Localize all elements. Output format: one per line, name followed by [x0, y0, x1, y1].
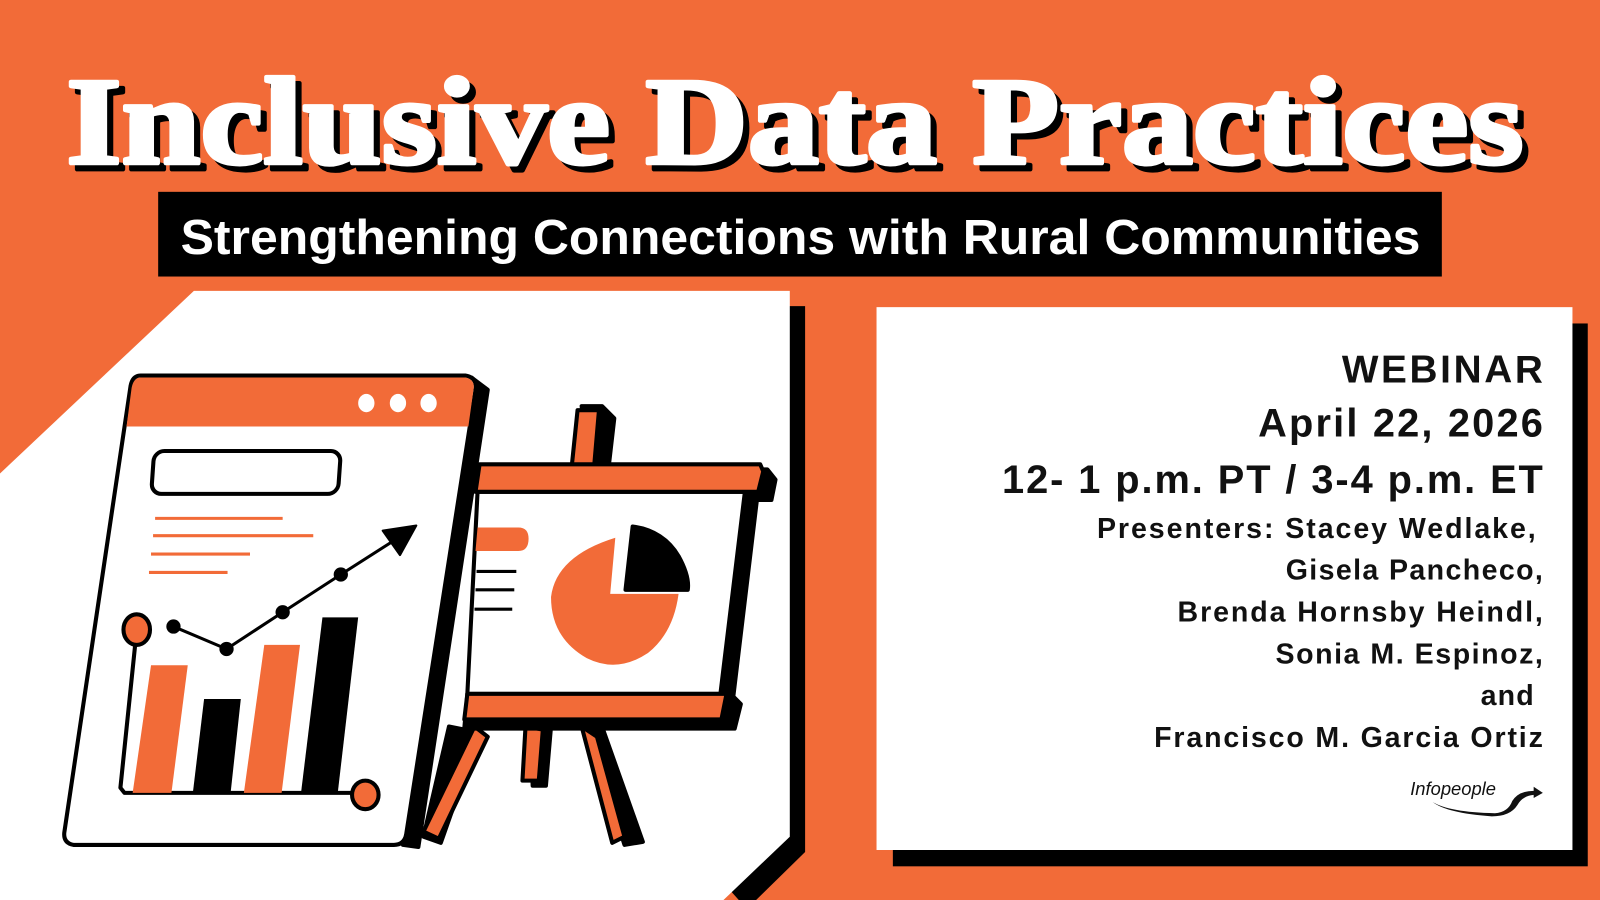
panel: illustration — [0, 291, 805, 900]
presenters — [1097, 513, 1543, 754]
heading: webinar: WEBINAR — [1342, 349, 1543, 392]
logo: Infopeople — [1410, 778, 1543, 816]
presenters: Presenters: Stacey Wedlake, — [1097, 513, 1536, 545]
subtitle banner — [158, 192, 1442, 277]
presenters: and — [1481, 680, 1534, 712]
logo: Infopeople: Infopeople — [1410, 778, 1496, 799]
icon: tablet with chart — [64, 376, 488, 847]
subtitle banner: Strengthening Connections with Rural Communities — [181, 211, 1420, 265]
time: 12- 1 p.m. PT / 3-4 p.m. ET — [1002, 458, 1543, 502]
title: Inclusive Data Practices — [66, 52, 1523, 190]
panel: webinar details — [877, 307, 1588, 866]
icon: easel with pie chart — [423, 406, 776, 845]
title: Inclusive Data Practices — [72, 58, 1530, 196]
presenters: Francisco M. Garcia Ortiz — [1154, 722, 1543, 754]
presenters: Sonia M. Espinoz, — [1276, 638, 1543, 670]
date: April 22, 2026 — [1258, 402, 1543, 446]
presenters: Gisela Pancheco, — [1286, 555, 1543, 587]
presenters: Brenda Hornsby Heindl, — [1178, 596, 1543, 628]
